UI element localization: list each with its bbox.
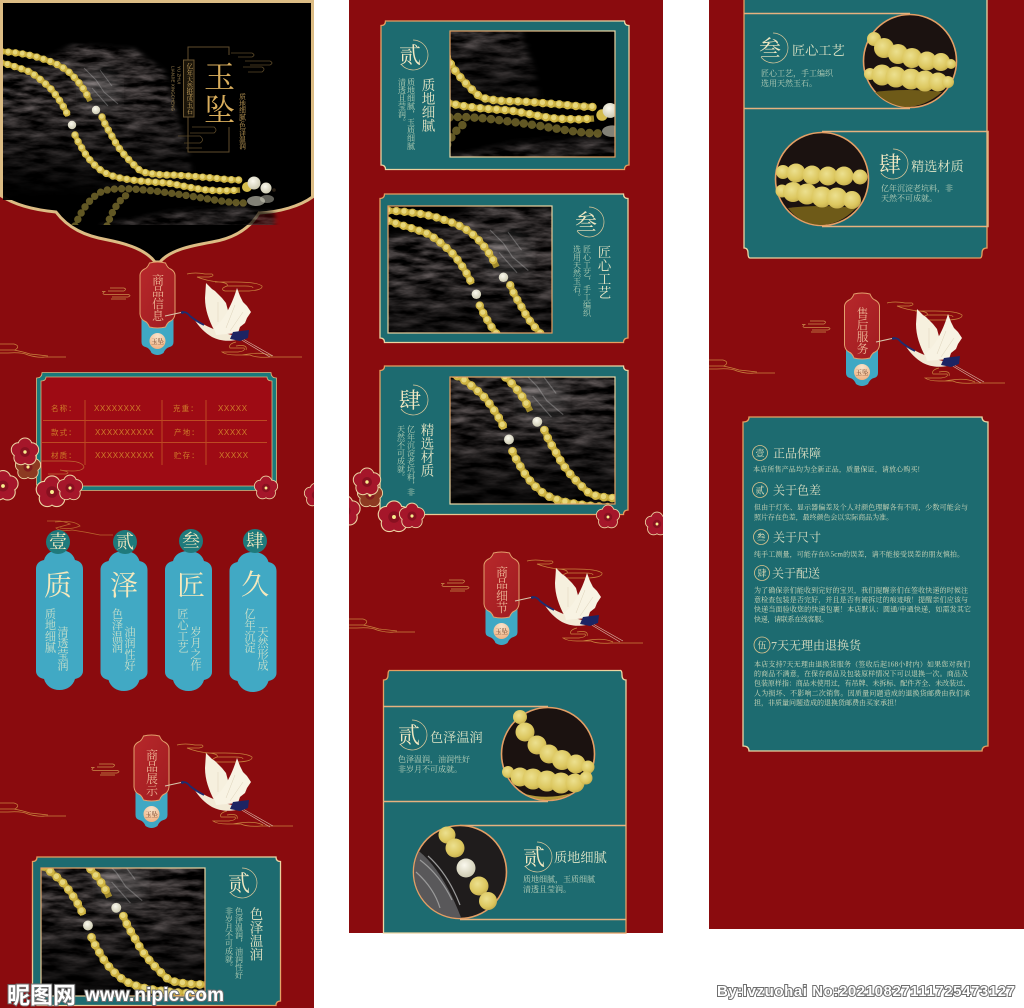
- item: 正品保障: 本店所售产品均为全新正品，质量保证，请放心购买!: [753, 464, 920, 474]
- text: 质地细腻: 质地细腻，玉质细腻: [523, 874, 595, 885]
- product info table panel: [36, 372, 276, 490]
- product card: 色泽温润: 非岁月不可成就。: [224, 906, 234, 971]
- numeral badge: 叁: [575, 210, 597, 235]
- item: 关于配送: 为了确保亲们能收到完好的宝贝，我们提醒亲们在签收快递的时候注: [754, 586, 968, 596]
- text: 色泽温润: 贰: [398, 723, 420, 748]
- section badge: 商品信息: 商品信息: [150, 273, 164, 321]
- text: 精选材质: 天然不可成就。: [881, 193, 937, 203]
- section badge: 商品展示: 商品展示: [144, 748, 158, 796]
- item: 关于配送: 肆: [757, 568, 767, 578]
- hero title block: YU ZHUI: [176, 66, 182, 84]
- product card: 色泽温润: 色泽温润，油润性好: [234, 906, 244, 980]
- item: 7天无理由退换货: 7天无理由退换货: [771, 638, 862, 652]
- item: 7天无理由退换货: 担，非质量问题造成的退换货邮费由买家承担！: [754, 698, 901, 708]
- item: 正品保障: 正品保障: [773, 446, 821, 460]
- detail: 色泽温润 circle photo: [502, 708, 594, 800]
- pill: 匠: 叁: [182, 531, 200, 551]
- product card: 质地细腻: [380, 20, 630, 170]
- text: 精选材质: 精选材质: [911, 158, 964, 174]
- watermark: site logo: www.nipic.com: [84, 985, 224, 1006]
- item: 关于配送: [754, 566, 971, 624]
- text: 色泽温润: [398, 720, 483, 774]
- item: 关于配送: 快递当面验收您的快递包裹！本店默认：圆通/申通快递，如需发其它: [754, 604, 971, 614]
- numeral badge: 贰: [228, 871, 250, 896]
- text: 色泽温润: 色泽温润，油润性好: [398, 754, 470, 765]
- detail panel: upper part: [383, 670, 626, 933]
- numeral badge: [399, 385, 428, 415]
- pill: 泽: 泽: [110, 570, 138, 602]
- product card: 色泽温润: [32, 856, 282, 1006]
- plum blossoms: column 1: [0, 438, 327, 506]
- section badge: 商品细节: [484, 552, 519, 645]
- item: 关于色差: 但由于灯光、显示器偏差及个人对颜色理解各有不同，少数可能会与: [754, 502, 968, 512]
- pill: 泽: 贰: [116, 532, 134, 552]
- crane and clouds: section four: [709, 302, 1005, 383]
- text: 质地细腻: 质地细腻: [554, 849, 607, 865]
- text: 精选材质: 肆: [879, 152, 901, 177]
- product card: 匠心工艺: [379, 193, 629, 344]
- thin cloud above pills: [47, 521, 113, 535]
- item: 正品保障: 壹: [755, 448, 765, 458]
- product info table panel: 克重：: [173, 404, 199, 413]
- product info table panel: XXXXX: [218, 428, 248, 437]
- hero title block: 质地细腻/色泽温润: [238, 92, 246, 150]
- product card: 质地细腻: 清透且莹润。: [398, 77, 406, 126]
- product info table panel: XXXXXXXXXX: [95, 451, 154, 460]
- item: 关于色差: 贰: [755, 484, 765, 496]
- item: 关于尺寸: 纯手工测量，可能存在0.5cm的误差，请不能接受误差的朋友慎拍。: [754, 550, 964, 560]
- product info table panel: XXXXXXXX: [94, 404, 142, 413]
- product info table panel: XXXXX: [219, 451, 249, 460]
- pill: 久: 亿年沉淀: [243, 608, 256, 653]
- product info table panel: XXXXX: [218, 404, 248, 413]
- product card: 精选材质: 天然不可成就。: [396, 425, 406, 481]
- detail: 匠心工艺 circle photo: [864, 14, 956, 108]
- hero title block: 坠: [204, 93, 235, 128]
- item: 关于尺寸: 关于尺寸: [773, 530, 821, 544]
- numeral badge: [399, 40, 428, 70]
- text: 匠心工艺: 选用天然玉石。: [761, 78, 817, 88]
- text: 质地细腻: 清透且莹润。: [523, 884, 571, 894]
- item: 7天无理由退换货: 本店支持7天无理由退换货服务（签收后起168小时内）如果您对我们: [754, 660, 970, 668]
- pill: 久: 久: [241, 569, 269, 601]
- item: 7天无理由退换货: 人为损坏、不影响二次销售。因质量问题造成的退换货邮费由我们承: [754, 688, 970, 698]
- detail: 质地细腻 circle photo: [410, 826, 506, 925]
- pill: 质: 质地细腻: [44, 607, 56, 653]
- text: 匠心工艺: [759, 33, 845, 88]
- hero title block: LIANJIE XINGCHENG: [170, 66, 176, 112]
- numeral badge: 肆: [399, 388, 421, 413]
- crane and clouds: section three: [349, 560, 643, 643]
- pill: 久: 肆: [246, 531, 264, 551]
- product card: 质地细腻: 质地细腻: [420, 78, 435, 133]
- item: 7天无理由退换货: 的商品不满意，在保存商品及包装原样情况下可以退换一次。商品及: [754, 669, 968, 679]
- product info table panel: 材质：: [51, 450, 77, 460]
- watermark: site logo: 昵图网: [7, 982, 76, 1008]
- pill: 久: 天然形成: [256, 626, 269, 671]
- plum blossoms: column 2: [330, 468, 668, 534]
- item: 正品保障: [752, 446, 920, 474]
- product card: 匠心工艺: 匠心工艺，手工编织: [582, 245, 592, 318]
- pill: 质: [36, 530, 83, 690]
- text: 精选材质: [879, 149, 964, 203]
- pill: 匠: [165, 529, 212, 691]
- detail panel: lower part: [744, 0, 988, 258]
- product card: 精选材质: 非: [406, 487, 416, 497]
- product card: 匠心工艺: 匠心工艺: [596, 245, 611, 299]
- detail: 精选材质 circle photo: [776, 132, 868, 226]
- watermark: site logo: [7, 982, 224, 1008]
- item: 7天无理由退换货: 伍: [757, 640, 767, 650]
- product info table panel: 贮存：: [174, 450, 200, 460]
- text: 质地细腻: 贰: [523, 845, 545, 870]
- numeral badge: [228, 868, 257, 898]
- item: 关于配送: 快递，请联系在线客服。: [754, 614, 828, 624]
- section badge: 商品展示: [134, 735, 169, 828]
- text: 质地细腻: [523, 842, 607, 894]
- product card: 质地细腻: 质地细腻，玉质细腻: [406, 77, 416, 151]
- hero title block: [170, 47, 272, 152]
- section badge: 商品信息: [140, 262, 175, 355]
- product info table panel: XXXXXXXXXX: [95, 428, 154, 437]
- pill: 久: [230, 529, 276, 692]
- item: 关于配送: 关于配送: [772, 566, 820, 580]
- product card: 色泽温润: 色泽温润: [248, 907, 263, 961]
- after-sales text panel: [743, 417, 988, 751]
- product card: 精选材质: 亿年沉淀老坑料，: [406, 424, 416, 489]
- text: 匠心工艺: 匠心工艺，手工编织: [761, 68, 834, 79]
- hero title block: 亿年天然挺成玉石: [185, 62, 192, 115]
- item: 7天无理由退换货: [754, 637, 970, 708]
- numeral badge: [575, 207, 604, 237]
- product info table panel: 产地：: [174, 427, 200, 437]
- crane and clouds: section one: [0, 273, 302, 357]
- column 2 background: [349, 0, 663, 933]
- product info table panel: 名称：: [51, 403, 77, 413]
- pill: 匠: 匠: [177, 571, 205, 602]
- product info table panel: 款式：: [51, 427, 77, 437]
- text: 匠心工艺: 匠心工艺: [792, 43, 845, 58]
- hero title block: 玉: [204, 60, 235, 95]
- section badge: 商品细节: 商品细节: [494, 565, 508, 613]
- pill: 质: 清透莹润: [56, 625, 69, 671]
- text: 匠心工艺: 叁: [759, 36, 781, 61]
- column 1 background: [0, 0, 314, 1008]
- item: 关于配送: 意检查包装是否完好，并且是否有被拆过的痕迹哦！提醒亲们应该与: [754, 595, 968, 605]
- pill: 质: 壹: [49, 532, 67, 552]
- hero panel: necklace banner: [0, 2, 312, 262]
- product card: 匠心工艺: 选用天然玉石。: [572, 244, 582, 301]
- pill: 匠: 岁月之作: [189, 625, 202, 671]
- pill: 质: 质: [44, 570, 72, 602]
- crane and clouds: section two: [0, 744, 293, 827]
- column 3 background: [709, 0, 1024, 929]
- product card: 精选材质: [379, 365, 629, 516]
- item: 关于尺寸: [754, 530, 964, 560]
- pill: 泽: 色泽温润: [110, 608, 123, 653]
- section badge: 售后服务: 售后服务: [855, 306, 869, 355]
- item: 关于色差: 关于色差: [773, 482, 821, 498]
- item: 关于色差: 照片存在色差，最终颜色会以实际商品为准。: [754, 512, 893, 522]
- section badge: 售后服务: [844, 293, 880, 386]
- pill: 匠: 匠心工艺: [176, 608, 189, 653]
- watermark: author and number: By:lvzuohai No:20210827111725473127: [717, 983, 1015, 1000]
- text: 色泽温润: 色泽温润: [430, 730, 483, 745]
- item: 关于尺寸: 叁: [756, 532, 766, 542]
- item: 关于色差: [752, 482, 968, 522]
- item: 7天无理由退换货: 包装原样指：商品未使用过，有吊牌、未拆标、配件齐全、未改装过、: [754, 678, 970, 688]
- pill: 泽: 油润性好: [123, 625, 136, 671]
- text: 色泽温润: 非岁月不可成就。: [398, 764, 462, 774]
- pill: 泽: [100, 530, 148, 691]
- numeral badge: 贰: [399, 43, 421, 68]
- text: 精选材质: 亿年沉淀老坑料，非: [881, 183, 953, 194]
- product card: 精选材质: 精选材质: [418, 422, 434, 478]
